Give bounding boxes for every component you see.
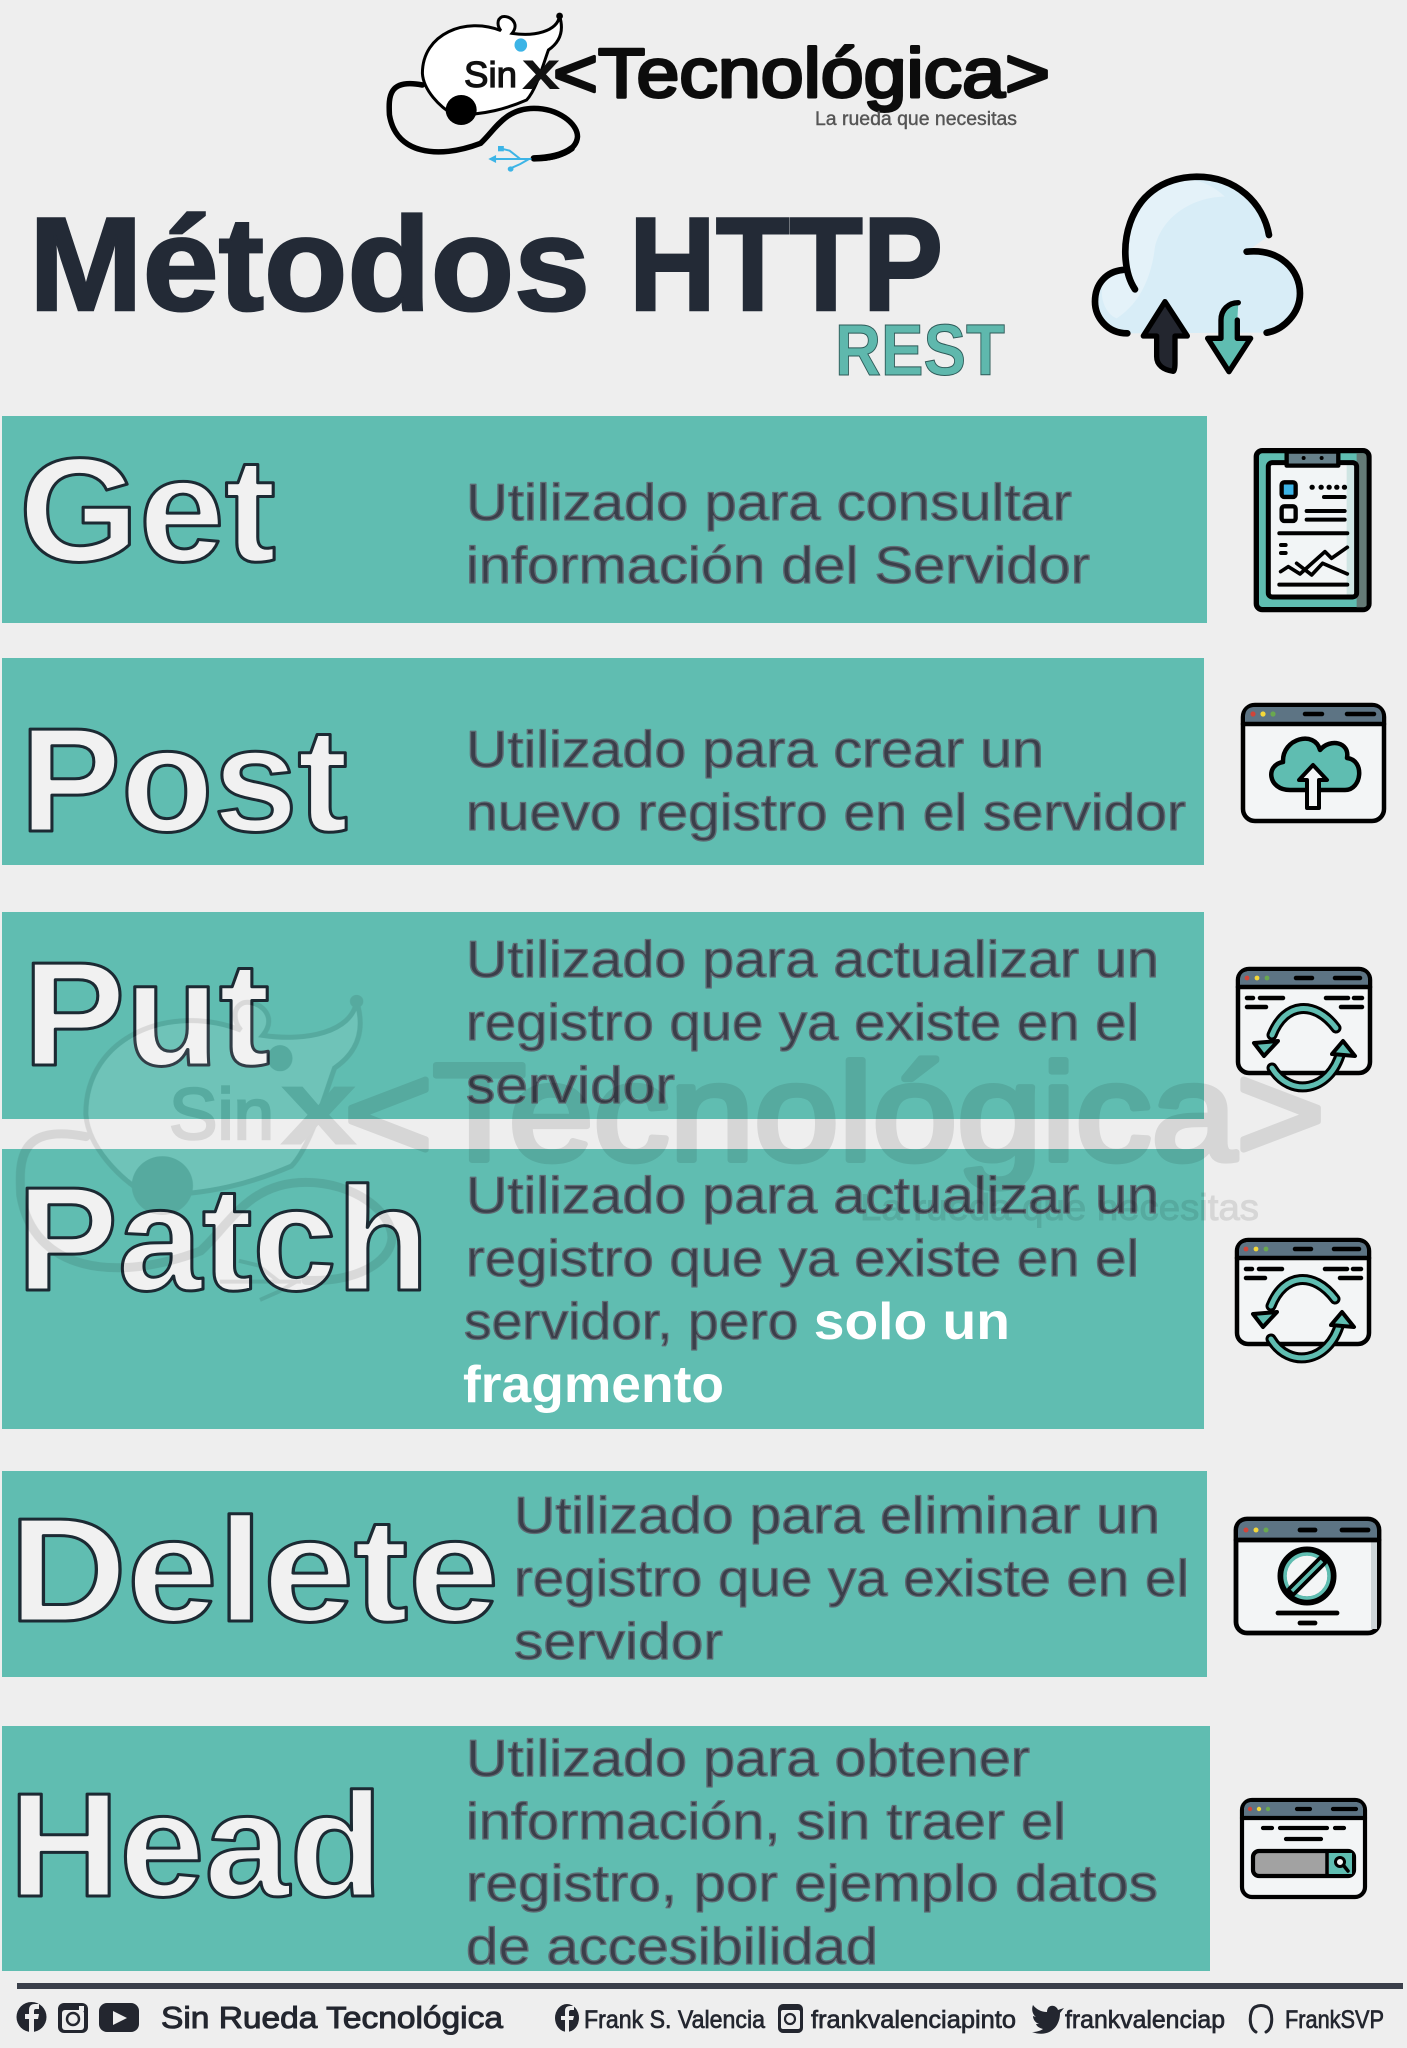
watermark wordmark: <Tecnológica> — [344, 1036, 1325, 1190]
icon: youtube — [99, 2003, 139, 2032]
description: Get: información del Servidor — [466, 537, 1090, 595]
logo tagline: La rueda que necesitas — [815, 109, 1017, 130]
icon: facebook small — [555, 2004, 579, 2032]
panel: Get — [2, 416, 1207, 623]
icon: cloud with up and down arrows — [1095, 177, 1300, 372]
description: Head: información, sin traer el — [466, 1793, 1066, 1851]
description: Get — [466, 474, 1090, 595]
icon: instagram small — [778, 2004, 803, 2033]
subtitle REST: REST — [835, 311, 1005, 391]
twitter handle: frankvalenciap — [1065, 2006, 1225, 2034]
description: Head: registro, por ejemplo datos — [466, 1855, 1158, 1913]
watermark logo — [20, 995, 1325, 1300]
description: Patch: fragmento — [463, 1356, 724, 1414]
bar: Patch — [2, 1149, 1204, 1429]
description: Post — [466, 721, 1186, 842]
channel name: Sin Rueda Tecnológica — [161, 2000, 504, 2035]
logo text x: x — [524, 43, 558, 99]
panel: Delete — [2, 1471, 1207, 1677]
title: Métodos — [29, 191, 590, 339]
panel: Post — [2, 658, 1204, 865]
description: Delete — [514, 1487, 1189, 1671]
method name: Delete: Delete — [9, 1488, 499, 1653]
bar: Head — [2, 1726, 1210, 1971]
icon: instagram — [58, 2003, 88, 2033]
description: Put: registro que ya existe en el — [466, 994, 1139, 1052]
description: Delete: servidor — [514, 1613, 723, 1671]
icon: twitter — [1032, 2005, 1064, 2034]
description: Post: nuevo registro en el servidor — [466, 784, 1186, 842]
icon: browser window with cloud upload — [1243, 705, 1384, 821]
description: Delete: Utilizado para eliminar un — [514, 1487, 1160, 1545]
description: Patch — [463, 1167, 1159, 1414]
description: Head: de accesibilidad — [466, 1918, 878, 1976]
bar: Post — [2, 658, 1204, 865]
method name: Get: Get — [19, 428, 276, 593]
description: Get: Utilizado para consultar — [466, 474, 1072, 532]
panel: Put — [2, 912, 1204, 1119]
bar: Put — [2, 912, 1204, 1119]
description: Patch: registro que ya existe en el — [466, 1230, 1139, 1288]
icon: clipboard with report — [1256, 451, 1369, 610]
icon: github — [1250, 2006, 1272, 2032]
watermark text x: x — [285, 1052, 352, 1164]
watermark tagline: La rueda que necesitas — [860, 1187, 1259, 1228]
description: Patch: servidor, pero solo un — [464, 1293, 1010, 1351]
description: Head: Utilizado para obtener — [466, 1730, 1030, 1788]
logo wordmark: <Tecnológica> — [553, 34, 1050, 112]
icon: facebook — [16, 2002, 46, 2032]
github handle: FrankSVP — [1285, 2006, 1384, 2034]
description: Put: servidor — [466, 1057, 675, 1115]
description: Put: Utilizado para actualizar un — [466, 931, 1159, 989]
description: Post: Utilizado para crear un — [466, 721, 1044, 779]
method name: Head: Head — [9, 1763, 383, 1928]
description: Patch: Utilizado para actualizar un — [466, 1167, 1159, 1225]
method name: Put: Put — [23, 932, 270, 1097]
icon: browser window with blocked sign — [1236, 1519, 1379, 1633]
footer divider line — [17, 1983, 1403, 1989]
facebook handle: Frank S. Valencia — [584, 2006, 765, 2034]
description: Put — [466, 931, 1159, 1115]
title — [29, 191, 943, 339]
icon: browser window with sync arrows — [1238, 969, 1370, 1087]
title: HTTP — [629, 191, 943, 339]
footer — [16, 2000, 1384, 2035]
watermark mouse and cable — [20, 995, 392, 1300]
logo: Sin Rueda Tecnológica — [389, 13, 1050, 172]
panel: Head — [2, 1726, 1210, 1976]
description: Head — [466, 1730, 1158, 1976]
bar: Delete — [2, 1471, 1207, 1677]
icon: browser window with search bar — [1242, 1800, 1365, 1897]
method name: Post: Post — [20, 698, 348, 863]
panel: Patch — [2, 1149, 1204, 1429]
method name: Patch: Patch — [17, 1157, 429, 1322]
logo mouse and cable — [389, 13, 578, 172]
watermark text Sin: Sin — [169, 1075, 274, 1155]
description: Delete: registro que ya existe en el — [514, 1550, 1189, 1608]
instagram handle: frankvalenciapinto — [811, 2006, 1016, 2034]
icon: browser window with sync arrows (patch) — [1237, 1240, 1369, 1358]
bar: Get — [2, 416, 1207, 623]
logo text Sin: Sin — [464, 54, 517, 95]
